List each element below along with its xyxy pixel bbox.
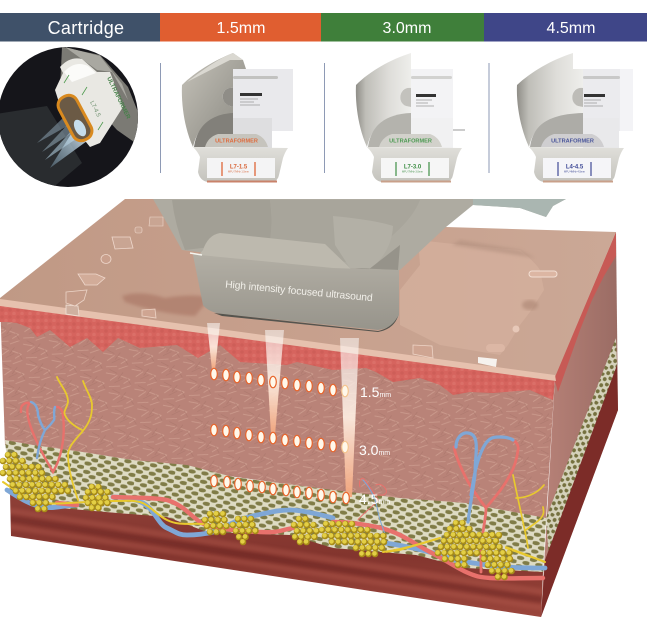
circular cartridge photo: ULTRAFORMER (105, 76, 131, 121)
header bar: 1.5mm (217, 20, 265, 37)
handpiece (153, 199, 566, 332)
right vessels (454, 433, 545, 572)
cartridge 4.5mm (517, 53, 633, 182)
skin block: fat layer (5, 440, 546, 575)
cartridge 1.5mm: L7-1.5 (230, 164, 248, 170)
main artery (57, 497, 543, 578)
header bar (0, 13, 647, 42)
ultrasound beams (207, 323, 359, 497)
left vessels (21, 377, 92, 500)
depth label 3.0 mm: 3.0mm (359, 442, 390, 458)
header bar: 4.5mm (547, 20, 595, 37)
skin block: epidermis layer (0, 303, 555, 400)
focal points row 4.5 mm (211, 475, 349, 504)
skin block: right side face (541, 232, 618, 617)
focal points row 1.5 mm (211, 368, 348, 397)
main vein (7, 490, 545, 568)
cartridge 3.0mm (356, 53, 465, 182)
cartridge 3.0mm: ULTRAFORMER (389, 138, 432, 144)
dermis texture (0, 300, 555, 520)
skin block: muscle layer (5, 492, 545, 617)
handpiece caption: High intensity focused ultrasound (225, 280, 373, 304)
main nerve (3, 482, 545, 562)
cartridge 1.5mm: ULTRAFORMER (215, 138, 258, 144)
fat cell clusters (2, 454, 514, 577)
skin block: top surface (0, 199, 616, 381)
cartridge 4.5mm: L4-4.5 (566, 164, 584, 170)
header bar: Cartridge (48, 18, 124, 38)
nerve segment (386, 538, 440, 552)
cartridge 4.5mm: ULTRAFORMER (551, 138, 594, 144)
divider 2 (324, 63, 325, 173)
cartridge 1.5mm: MFU 7MHz 1.5mm (228, 170, 249, 174)
thin vessels near 4.5 mm (358, 478, 386, 535)
cartridge 3.0mm: L7-3.0 (404, 164, 422, 170)
divider 1 (160, 63, 161, 173)
cartridge 4.5mm: MFU 4MHz 4.5mm (564, 170, 585, 174)
depth label 1.5 mm: 1.5mm (360, 384, 391, 400)
focal points row 3.0 mm (211, 424, 348, 453)
circular cartridge photo: L7-4.5 (88, 100, 101, 119)
depth label 4.5 mm: 4.5mm (359, 491, 390, 507)
divider 3 (488, 63, 490, 173)
skin block: dermis front face (0, 300, 555, 520)
header bar: 3.0mm (383, 20, 431, 37)
cartridge 3.0mm: MFU 7MHz 3.0mm (402, 170, 423, 174)
circular cartridge photo (0, 46, 140, 190)
cartridge 1.5mm (182, 53, 293, 182)
